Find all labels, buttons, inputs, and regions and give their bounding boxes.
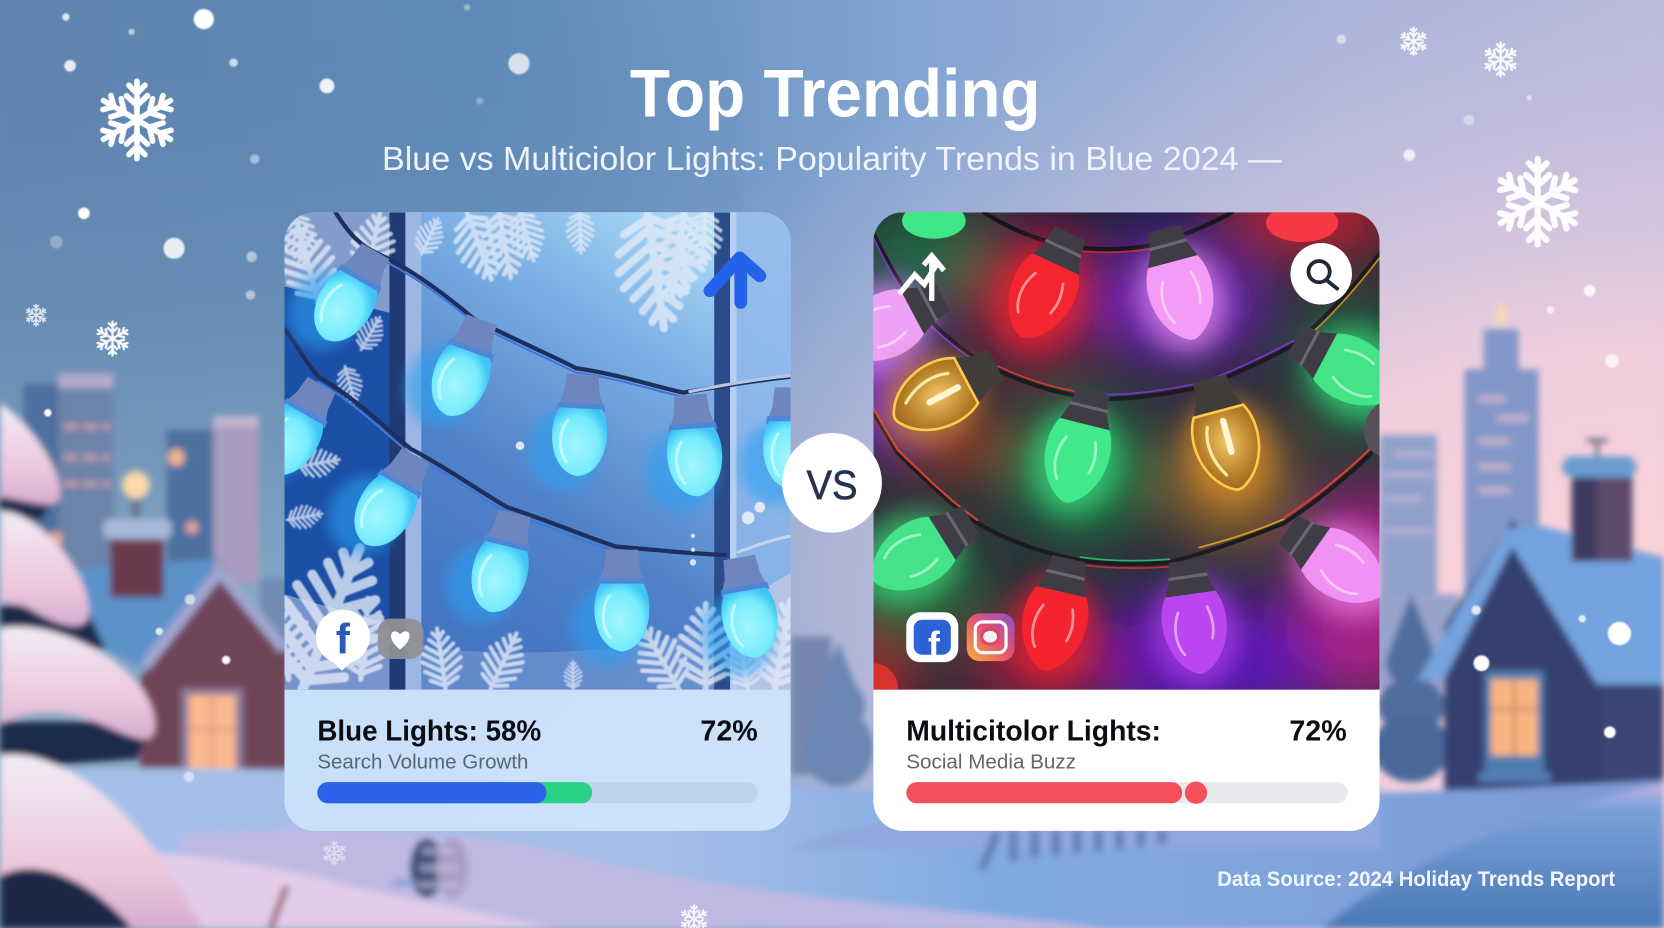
data source note: Data Source: 2024 Holiday Trends Report <box>1217 868 1615 891</box>
icon: facebook speech bubble: f <box>336 616 351 663</box>
vs badge: VS <box>807 462 857 508</box>
blue bulbs <box>284 243 791 684</box>
light strands <box>873 212 1380 568</box>
icon: heart tile <box>378 619 423 659</box>
left foreground snowy tree <box>0 403 287 928</box>
panel: blue lights card <box>219 205 818 831</box>
value: 72% blue: 72% <box>700 716 758 748</box>
vs badge <box>782 433 882 533</box>
icon: instagram tile <box>967 613 1015 661</box>
right house <box>1417 440 1664 791</box>
multicolor bulbs <box>873 212 1380 690</box>
left house <box>67 519 289 786</box>
right small pine <box>1373 594 1450 782</box>
caption: social media buzz: Social Media Buzz <box>906 750 1076 773</box>
progress bar: blue lights <box>317 782 758 803</box>
label: multicolor lights heading: Multicitolor Lights: <box>906 716 1161 748</box>
panel: multicolor lights card <box>809 179 1433 831</box>
value: 72% multicolor: 72% <box>1289 716 1347 748</box>
small background pine <box>410 838 468 898</box>
light strands <box>284 212 791 555</box>
progress bar: multicolor lights <box>906 782 1348 804</box>
subtitle: Blue vs Multiciolor Lights: Popularity Trends in Blue 2024 — <box>382 140 1282 177</box>
icon: search circle <box>1290 243 1352 305</box>
photo: multicolor string lights <box>873 212 1380 690</box>
icon: white trend arrow <box>901 256 942 298</box>
left city skyline <box>23 374 292 663</box>
label: blue lights heading: Blue Lights: 58% <box>317 716 541 748</box>
background fence <box>982 830 1162 870</box>
snow ground <box>0 768 1664 928</box>
title: Top Trending <box>630 57 1041 132</box>
icon: facebook tile <box>906 612 958 665</box>
icon: facebook speech bubble <box>316 610 370 671</box>
right city skyline <box>1373 301 1539 782</box>
falling snow dots <box>44 4 1631 782</box>
icon: facebook tile: f <box>928 624 941 665</box>
centre background tree and town <box>791 637 873 786</box>
photo: blue string lights on frosted window <box>219 205 818 708</box>
caption: search volume growth: Search Volume Growth <box>317 750 529 773</box>
icon: blue up arrow <box>710 258 760 302</box>
